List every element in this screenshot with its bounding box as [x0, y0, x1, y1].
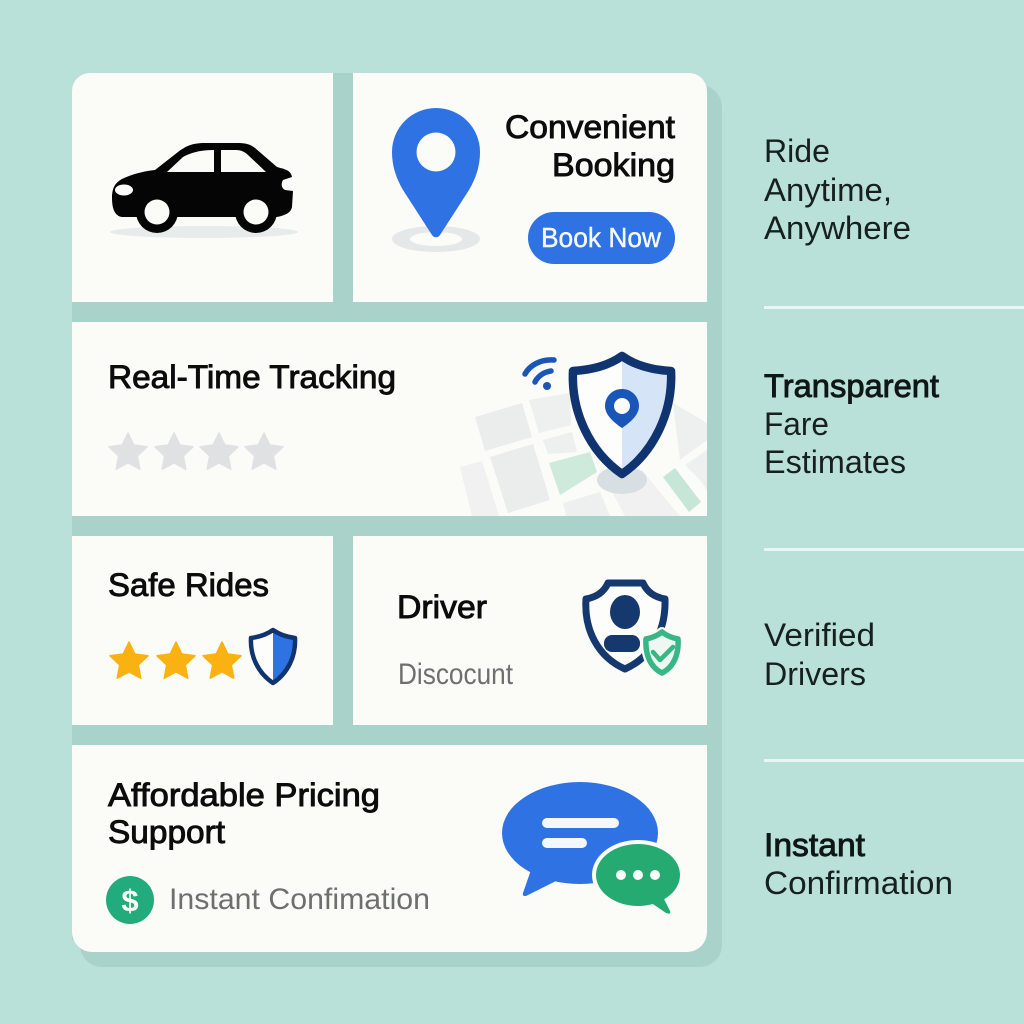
panel: real-time tracking: [72, 322, 707, 516]
heading: affordable pricing support: [108, 777, 380, 850]
text block: transparent fare estimates: Estimates: [764, 444, 906, 480]
icon: dollar badge: $: [121, 883, 139, 918]
icon: location pin: [392, 108, 480, 252]
heading: affordable pricing support: Support: [108, 814, 225, 850]
icon: chat bubbles: [502, 782, 684, 914]
panel: affordable pricing support: [72, 745, 707, 952]
icon: car: [110, 143, 298, 238]
text block: verified drivers: [764, 617, 875, 692]
panel backing shadow: [72, 73, 722, 967]
button: book now: Book Now: [541, 222, 662, 253]
text block: verified drivers: Verified: [764, 617, 875, 653]
label: discount: Discocunt: [398, 658, 514, 691]
text block: transparent fare estimates: Transparent: [764, 368, 939, 404]
text block: ride anytime anywhere: Ride: [764, 133, 830, 169]
panel: convenient booking: [353, 73, 707, 302]
text block: ride anytime anywhere: Anytime,: [764, 172, 892, 208]
rating stars: gold: [110, 642, 241, 678]
button: book now: [528, 212, 675, 264]
map background: [460, 393, 707, 516]
heading: safe rides: Safe Rides: [108, 567, 269, 603]
icon: small shield: [251, 630, 295, 683]
heading: convenient booking: Convenient: [505, 109, 675, 145]
panel: car: [72, 73, 333, 302]
icon: green check shield: [646, 632, 678, 673]
heading: convenient booking: Booking: [552, 147, 675, 183]
icon: wifi signal: [525, 360, 554, 390]
heading: convenient booking: [505, 109, 675, 183]
icon: shield with pin: [573, 356, 671, 474]
panel: driver: [353, 536, 707, 725]
icon: dollar badge: [106, 876, 154, 924]
heading: driver: Driver: [397, 589, 487, 625]
text block: verified drivers: Drivers: [764, 656, 866, 692]
panel: safe rides: [72, 536, 333, 725]
text block: ride anytime anywhere: Anywhere: [764, 210, 911, 246]
heading: affordable pricing support: Affordable Pricing: [108, 777, 380, 813]
text block: transparent fare estimates: [764, 368, 939, 480]
icon: driver shield: [586, 583, 665, 669]
text block: instant confirmation: Instant: [764, 827, 865, 863]
heading: real-time tracking: Real-Time Tracking: [108, 359, 396, 395]
text block: transparent fare estimates: Fare: [764, 406, 829, 442]
text block: instant confirmation: Confirmation: [764, 865, 953, 901]
text block: instant confirmation: [764, 827, 953, 901]
label: instant confirmation: Instant Confimation: [169, 883, 430, 916]
rating stars: grey: [109, 433, 283, 469]
text block: ride anytime anywhere: [764, 133, 911, 246]
